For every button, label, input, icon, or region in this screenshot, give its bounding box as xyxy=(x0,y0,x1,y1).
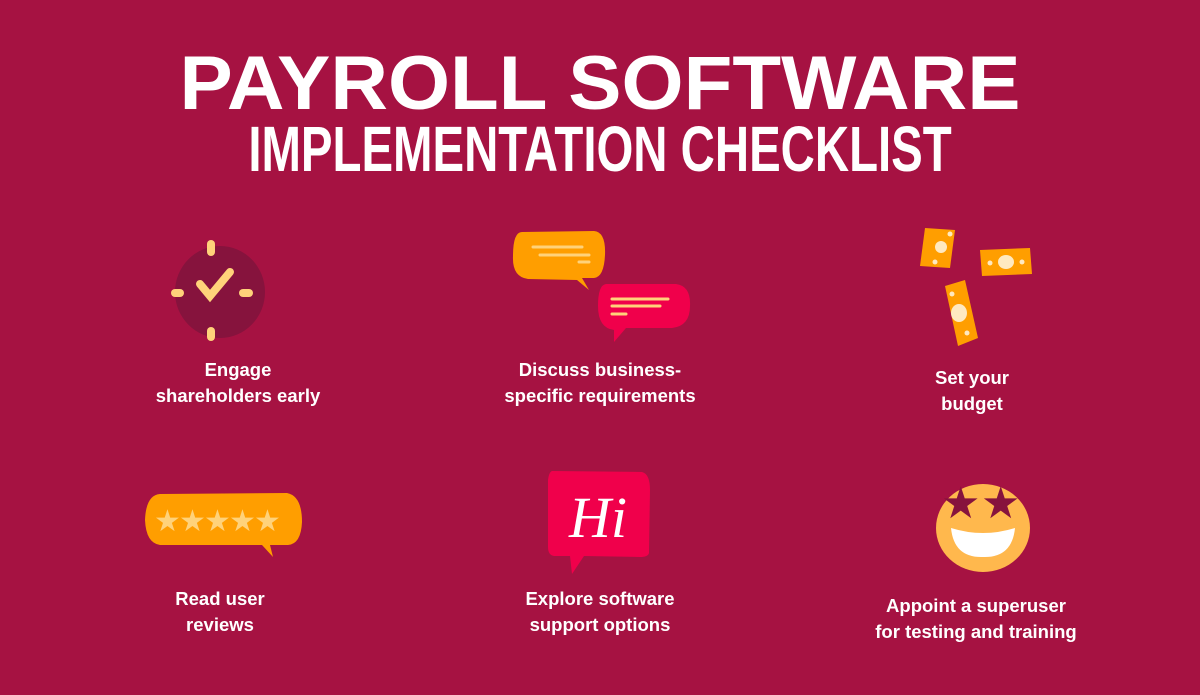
icon: reviews bubble: ★ xyxy=(204,504,231,539)
label: support options: support options xyxy=(530,614,670,635)
icon: speech bubbles xyxy=(513,231,690,342)
icon: star eyes smiley: ★ xyxy=(941,478,980,529)
icon: star eyes smiley xyxy=(936,478,1030,572)
label: read reviews xyxy=(175,588,265,635)
icon: reviews bubble xyxy=(145,493,302,557)
title: PAYROLL SOFTWARE xyxy=(180,41,1020,126)
label: support options: Explore software xyxy=(525,588,675,609)
label: support options xyxy=(525,588,675,635)
icon: reviews bubble: ★ xyxy=(229,504,256,539)
label: engage shareholders: shareholders early xyxy=(156,385,320,406)
subtitle: IMPLEMENTATION CHECKLIST xyxy=(248,113,952,185)
icon: reviews bubble: ★ xyxy=(254,504,281,539)
label: set budget: Set your xyxy=(935,367,1009,388)
icon: Hi bubble: Hi xyxy=(568,485,627,550)
label: engage shareholders: Engage xyxy=(205,359,271,380)
icon: reviews bubble: ★ xyxy=(154,504,181,539)
icon: clock check xyxy=(175,244,265,338)
label: read reviews: reviews xyxy=(186,614,254,635)
icon: star eyes smiley: ★ xyxy=(981,478,1020,529)
label: engage shareholders xyxy=(156,359,320,406)
label: discuss requirements xyxy=(504,359,696,406)
label: read reviews: Read user xyxy=(175,588,265,609)
label: discuss requirements: specific requirements xyxy=(504,385,696,406)
label: appoint superuser: for testing and training xyxy=(875,621,1077,642)
label: appoint superuser xyxy=(875,595,1077,642)
icon: reviews bubble: ★ xyxy=(179,504,206,539)
label: appoint superuser: Appoint a superuser xyxy=(886,595,1066,616)
label: set budget: budget xyxy=(941,393,1003,414)
icon: Hi bubble xyxy=(548,471,650,574)
icon: money bills xyxy=(920,228,1032,346)
label: set budget xyxy=(935,367,1009,414)
label: discuss requirements: Discuss business- xyxy=(519,359,681,380)
